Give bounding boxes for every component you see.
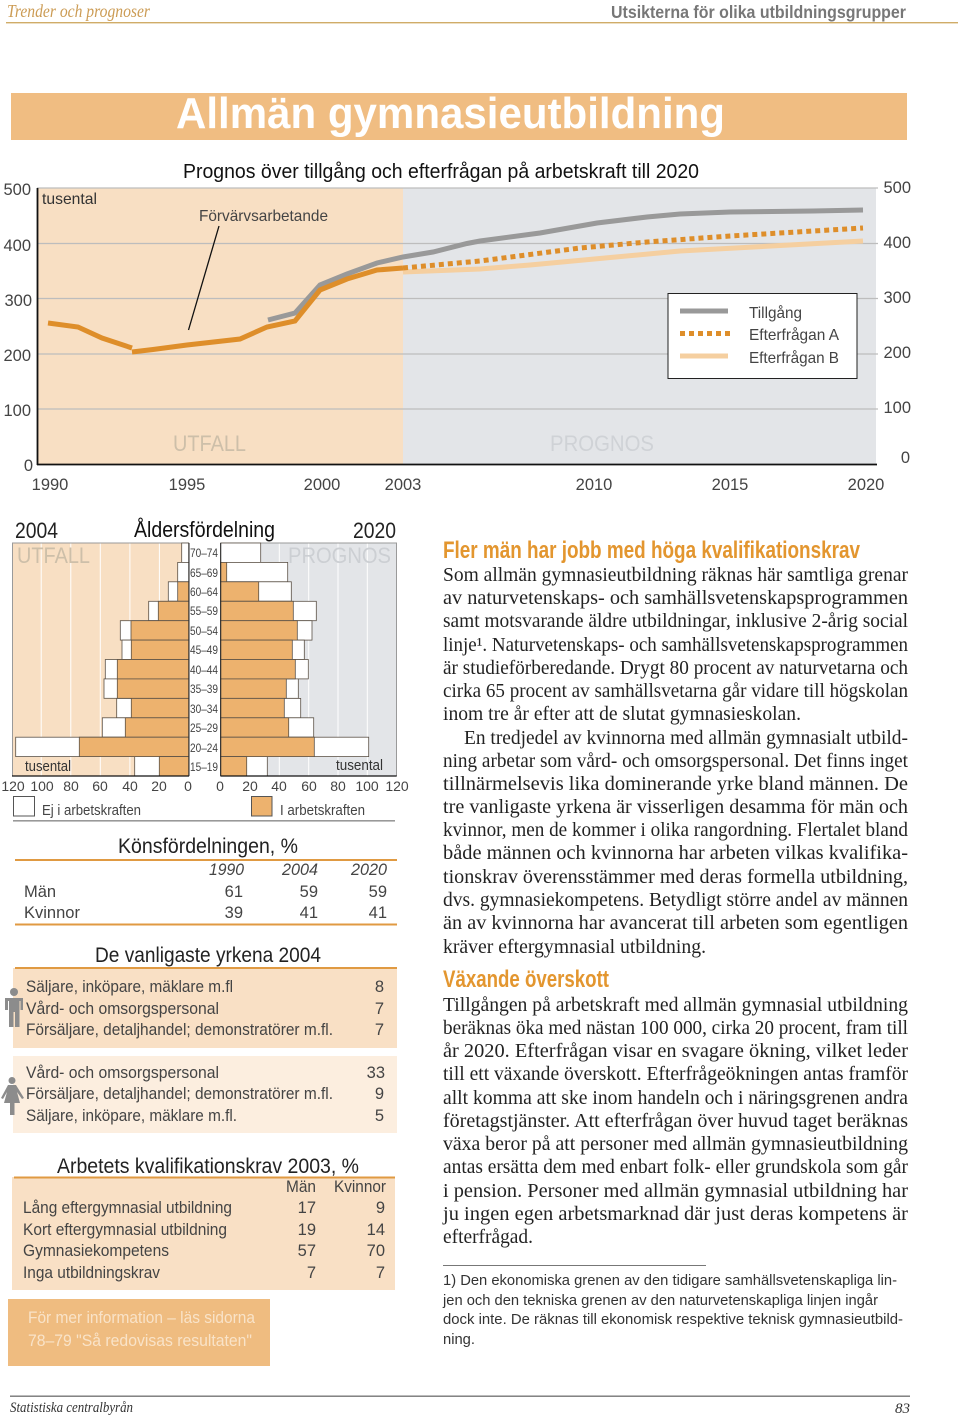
panel: men: Säljare, inköpare, mäklare m.fl — [26, 978, 233, 996]
body text: second section: ju ingen egen arbetsmarknad där just deras kompetens är — [442, 1203, 908, 1225]
page footer: Statistiska centralbyrån — [10, 1400, 133, 1416]
table: gender distribution: 41 — [300, 904, 318, 922]
legend: Tillgång — [749, 304, 802, 322]
table: qualification requirements: 57 — [298, 1242, 316, 1260]
table: qualification requirements: Lång eftergymnasial utbildning — [23, 1199, 232, 1217]
callout: more information: 78–79 "Så redovisas resultaten" — [28, 1332, 252, 1350]
age group labels: 60–64 — [190, 585, 218, 599]
table: gender distribution: Kvinnor — [24, 904, 80, 922]
pyramid headings: 2004 — [15, 518, 58, 543]
table: qualification requirements: Inga utbildningskrav — [23, 1264, 161, 1282]
pyramid x axis: 100 — [30, 778, 54, 794]
series: Förvärvsarbetande — [48, 268, 403, 352]
panel: 2020 forecast — [221, 543, 397, 776]
chart title: Prognos över tillgång och efterfrågan på arbetskraft till 2020 — [183, 160, 699, 183]
table: gender distribution: Könsfördelningen, % — [118, 835, 298, 858]
body text: second section: allt komma att ske inom handeln och i näringsgrenen andra — [443, 1087, 908, 1109]
table: gender distribution: 59 — [300, 883, 318, 901]
pyramid x axis: 20 — [242, 778, 258, 794]
panel: women: Vård- och omsorgspersonal — [26, 1064, 219, 1082]
pyramid x axis: 40 — [122, 778, 138, 794]
panel: women: 5 — [375, 1107, 384, 1125]
x axis: 2003 — [385, 476, 421, 494]
series: Tillgång — [268, 210, 863, 320]
page footer: 83 — [895, 1401, 910, 1417]
age group labels: 20–24 — [190, 741, 218, 755]
panel: men — [13, 967, 397, 1048]
series: Efterfrågan A — [403, 228, 863, 268]
heading: Fler män har jobb: Fler män har jobb med höga kvalifikationskrav — [443, 537, 861, 564]
pyramid x axis: 20 — [151, 778, 167, 794]
x axis: 1995 — [169, 476, 205, 494]
table: qualification requirements: 19 — [298, 1221, 316, 1239]
legend: Efterfrågan A — [749, 326, 839, 344]
unit label: tusental — [42, 191, 97, 208]
table: qualification requirements: 70 — [367, 1242, 385, 1260]
age group labels: 45–49 — [190, 643, 218, 657]
region label: UTFALL: UTFALL — [173, 431, 246, 456]
x axis — [32, 476, 884, 494]
panel: men: 8 — [375, 978, 384, 996]
region label: PROGNOS: PROGNOS — [550, 431, 654, 456]
body text: second section: i pension. Personer med allmän gymnasial utbildning har — [443, 1180, 908, 1202]
pyramid legend: I arbetskraften — [280, 803, 365, 819]
age pyramid — [1, 517, 409, 822]
pyramid x axis: 40 — [271, 778, 287, 794]
left y axis: 300 — [4, 292, 32, 310]
panel: common occupations: De vanligaste yrkena 2004 — [95, 944, 321, 967]
table: qualification requirements: 14 — [367, 1221, 385, 1239]
panel: men: Vård- och omsorgspersonal — [26, 1000, 219, 1018]
table: gender distribution — [15, 835, 397, 926]
body text: second section: till ett växande överskott. Efterfrågeökningen antas framför — [443, 1063, 908, 1085]
left y axis: 0 — [24, 457, 33, 475]
pyramid x axis: 60 — [92, 778, 108, 794]
pyramid x axis: 80 — [330, 778, 346, 794]
table: gender distribution: 1990 — [209, 861, 245, 879]
table: qualification requirements: Kort eftergymnasial utbildning — [23, 1221, 227, 1239]
left y axis: 400 — [3, 237, 31, 255]
pyramid x axis: 100 — [355, 778, 379, 794]
panel: 2004 outcome — [12, 543, 189, 776]
body text: first section: tionskrav överensstämmer med deras formella utbildning, — [443, 866, 908, 888]
table: gender distribution: 59 — [369, 883, 387, 901]
table: qualification requirements: 7 — [376, 1264, 385, 1282]
body text: first section: av naturvetenskaps- och samhällsvetenskapsprogrammen — [443, 587, 908, 609]
age group labels: 35–39 — [190, 682, 218, 696]
body text: second section: år 2020. Efterfrågan visar en svagare ökning, vilket leder — [443, 1040, 908, 1062]
title band: Allmän gymnasieutbildning — [176, 89, 725, 138]
panel: women: Säljare, inköpare, mäklare m.fl. — [26, 1107, 237, 1125]
right y axis: 500 — [883, 179, 911, 197]
table: qualification requirements: 7 — [307, 1264, 316, 1282]
table: qualification requirements: Män — [286, 1178, 316, 1196]
body text: first section: linje¹. Naturvetenskaps- och samhällsvetenskapsprogrammen — [443, 634, 908, 656]
running header: Utsikterna för olika utbildningsgrupper — [611, 2, 906, 22]
right y axis: 0 — [901, 449, 910, 467]
footnote: jen och den tekniska grenen av den naturvetenskapliga linjen ingår — [442, 1293, 878, 1309]
pyramid x axis: 80 — [63, 778, 79, 794]
body text: second section: efterfrågad. — [443, 1226, 533, 1248]
body text: second section: beräknas öka med nästan 100 000, cirka 20 procent, fram till — [443, 1017, 908, 1039]
page footer — [10, 1396, 910, 1417]
body text: first section: En tredjedel av kvinnorna med allmän gymnasialt utbild- — [464, 727, 908, 749]
heading: Växande överskott: Växande överskott — [443, 966, 609, 993]
body text: first section: inom tre år efter att de slutat gymnasieskolan. — [443, 703, 801, 725]
callout: more information — [8, 1299, 270, 1366]
table: qualification requirements: Arbetets kvalifikationskrav 2003, % — [57, 1155, 359, 1178]
age group labels: 55–59 — [190, 604, 218, 618]
right y axis — [883, 179, 911, 467]
left y axis: 500 — [3, 181, 31, 199]
panel: women: 33 — [367, 1064, 385, 1082]
x axis: 2000 — [304, 476, 340, 494]
body text: second section — [442, 994, 908, 1248]
right y axis: 400 — [883, 234, 911, 252]
panel: 2020 forecast: PROGNOS — [288, 543, 391, 568]
body text: first section: dvs. gymnasiekompetens. Betydligt större andel av männen — [443, 889, 908, 911]
panel: common occupations — [1, 944, 397, 1133]
pyramid headings — [15, 517, 396, 543]
table: gender distribution: 2004 — [281, 861, 318, 879]
pyramid x axis: 60 — [301, 778, 317, 794]
pyramid headings: Åldersfördelning — [134, 517, 275, 542]
panel: women: 9 — [375, 1085, 384, 1103]
annotation: Förvärvsarbetande — [188, 208, 328, 330]
body text: first section: tre vanligaste yrkena är visserligen desamma för män och — [443, 796, 908, 818]
age group labels: 30–34 — [190, 702, 218, 716]
body text: first section: cirka 65 procent av samhällsvetarna går vidare till högskolan — [443, 680, 908, 702]
table: gender distribution: Män — [24, 883, 56, 901]
x axis: 1990 — [32, 476, 68, 494]
table: gender distribution: 2020 — [350, 861, 388, 879]
x axis: 2010 — [576, 476, 612, 494]
left y axis — [3, 181, 33, 475]
body text: first section: kvinnor, men de kommer i olika rangordning. Flertalet bland — [443, 819, 908, 841]
footnote: 1) Den ekonomiska grenen av den tidigare samhällsvetenskapliga lin- — [443, 1273, 897, 1289]
legend: Efterfrågan B — [749, 349, 839, 367]
running header — [6, 1, 958, 23]
body text: first section: både männen och kvinnorna har arbeten vilkas kvalifika- — [443, 842, 908, 864]
body text: first section: än av kvinnorna har avancerat till arbeten som egentligen — [443, 912, 908, 934]
body text: second section: antas ersätta dem med enbart folk- eller grundskola som går — [443, 1156, 908, 1178]
table: gender distribution: 41 — [369, 904, 387, 922]
left y axis: 200 — [3, 347, 31, 365]
line chart: supply and demand forecast — [3, 179, 911, 494]
body text: first section: Som allmän gymnasieutbildning räknas här samtliga grenar — [443, 564, 908, 586]
body text: first section — [443, 564, 908, 958]
title band — [11, 89, 907, 140]
annotation: Förvärvsarbetande: Förvärvsarbetande — [199, 208, 328, 225]
table: qualification requirements — [12, 1155, 395, 1290]
panel: 2004 outcome: tusental — [25, 759, 71, 775]
footnote: dock inte. De räknas till ekonomisk respektive teknisk gymnasieutbild- — [443, 1312, 903, 1328]
right y axis: 100 — [883, 399, 911, 417]
table: gender distribution: 39 — [225, 904, 243, 922]
panel: women: Försäljare, detaljhandel; demonstratörer m.fl. — [26, 1085, 333, 1103]
table: qualification requirements: 17 — [298, 1199, 316, 1217]
pyramid headings: 2020 — [353, 518, 396, 543]
pyramid legend — [13, 796, 395, 822]
panel: men: 7 — [375, 1021, 384, 1039]
pyramid x axis: 120 — [385, 778, 409, 794]
age group labels: 70–74 — [190, 546, 218, 560]
footnote — [442, 1265, 903, 1348]
age group labels: 40–44 — [190, 663, 218, 677]
table: qualification requirements: Gymnasiekompetens — [23, 1242, 169, 1260]
panel: men: Försäljare, detaljhandel; demonstratörer m.fl. — [26, 1021, 333, 1039]
pyramid x axis — [1, 778, 409, 794]
panel: women — [13, 1056, 397, 1133]
age group labels: 25–29 — [190, 721, 218, 735]
legend — [668, 294, 857, 378]
right y axis: 200 — [883, 344, 911, 362]
body text: second section: växa beror på att personer med allmän gymnasieutbildning — [443, 1133, 908, 1155]
x axis: 2020 — [848, 476, 884, 494]
body text: second section: Tillgången på arbetskraft med allmän gymnasial utbildning — [443, 994, 908, 1016]
pyramid x axis: 0 — [216, 778, 224, 794]
pyramid x axis: 0 — [184, 778, 192, 794]
table: qualification requirements: Kvinnor — [334, 1178, 386, 1196]
age group labels: 50–54 — [190, 624, 218, 638]
footnote: ning. — [443, 1332, 475, 1348]
table: qualification requirements: 9 — [376, 1199, 385, 1217]
panel: men: 7 — [375, 1000, 384, 1018]
body text: first section: är studieförberedande. Drygt 80 procent av naturvetarna och — [443, 657, 908, 679]
pyramid legend: Ej i arbetskraften — [42, 803, 141, 819]
body text: first section: ning arbetar som vård- och omsorgspersonal. Det finns inget — [443, 750, 908, 772]
right y axis: 300 — [883, 289, 911, 307]
body text: first section: tillnärmelsevis lika dominerande yrke bland männen. De — [443, 773, 908, 795]
x axis: 2015 — [712, 476, 748, 494]
pyramid x axis: 120 — [1, 778, 25, 794]
icon: woman — [1, 1077, 24, 1115]
body text: second section: företagstjänster. Att efterfrågan över huvud taget beräknas — [443, 1110, 908, 1132]
callout: more information: För mer information – läs sidorna — [28, 1309, 256, 1327]
left y axis: 100 — [3, 402, 31, 420]
icon: man — [5, 988, 23, 1027]
panel: 2004 outcome: UTFALL — [17, 543, 90, 568]
body text: first section: samt motsvarande äldre utbildningar, inklusive 2-årig social — [443, 610, 908, 632]
series: Efterfrågan B — [403, 241, 863, 272]
panel: 2020 forecast: tusental — [336, 758, 383, 774]
running header: Trender och prognoser — [7, 1, 151, 21]
age group labels — [190, 546, 218, 774]
body text: first section: kräver eftergymnasial utbildning. — [443, 936, 706, 958]
age group labels: 15–19 — [190, 760, 218, 774]
age group labels: 65–69 — [190, 566, 218, 580]
table: gender distribution: 61 — [225, 883, 243, 901]
